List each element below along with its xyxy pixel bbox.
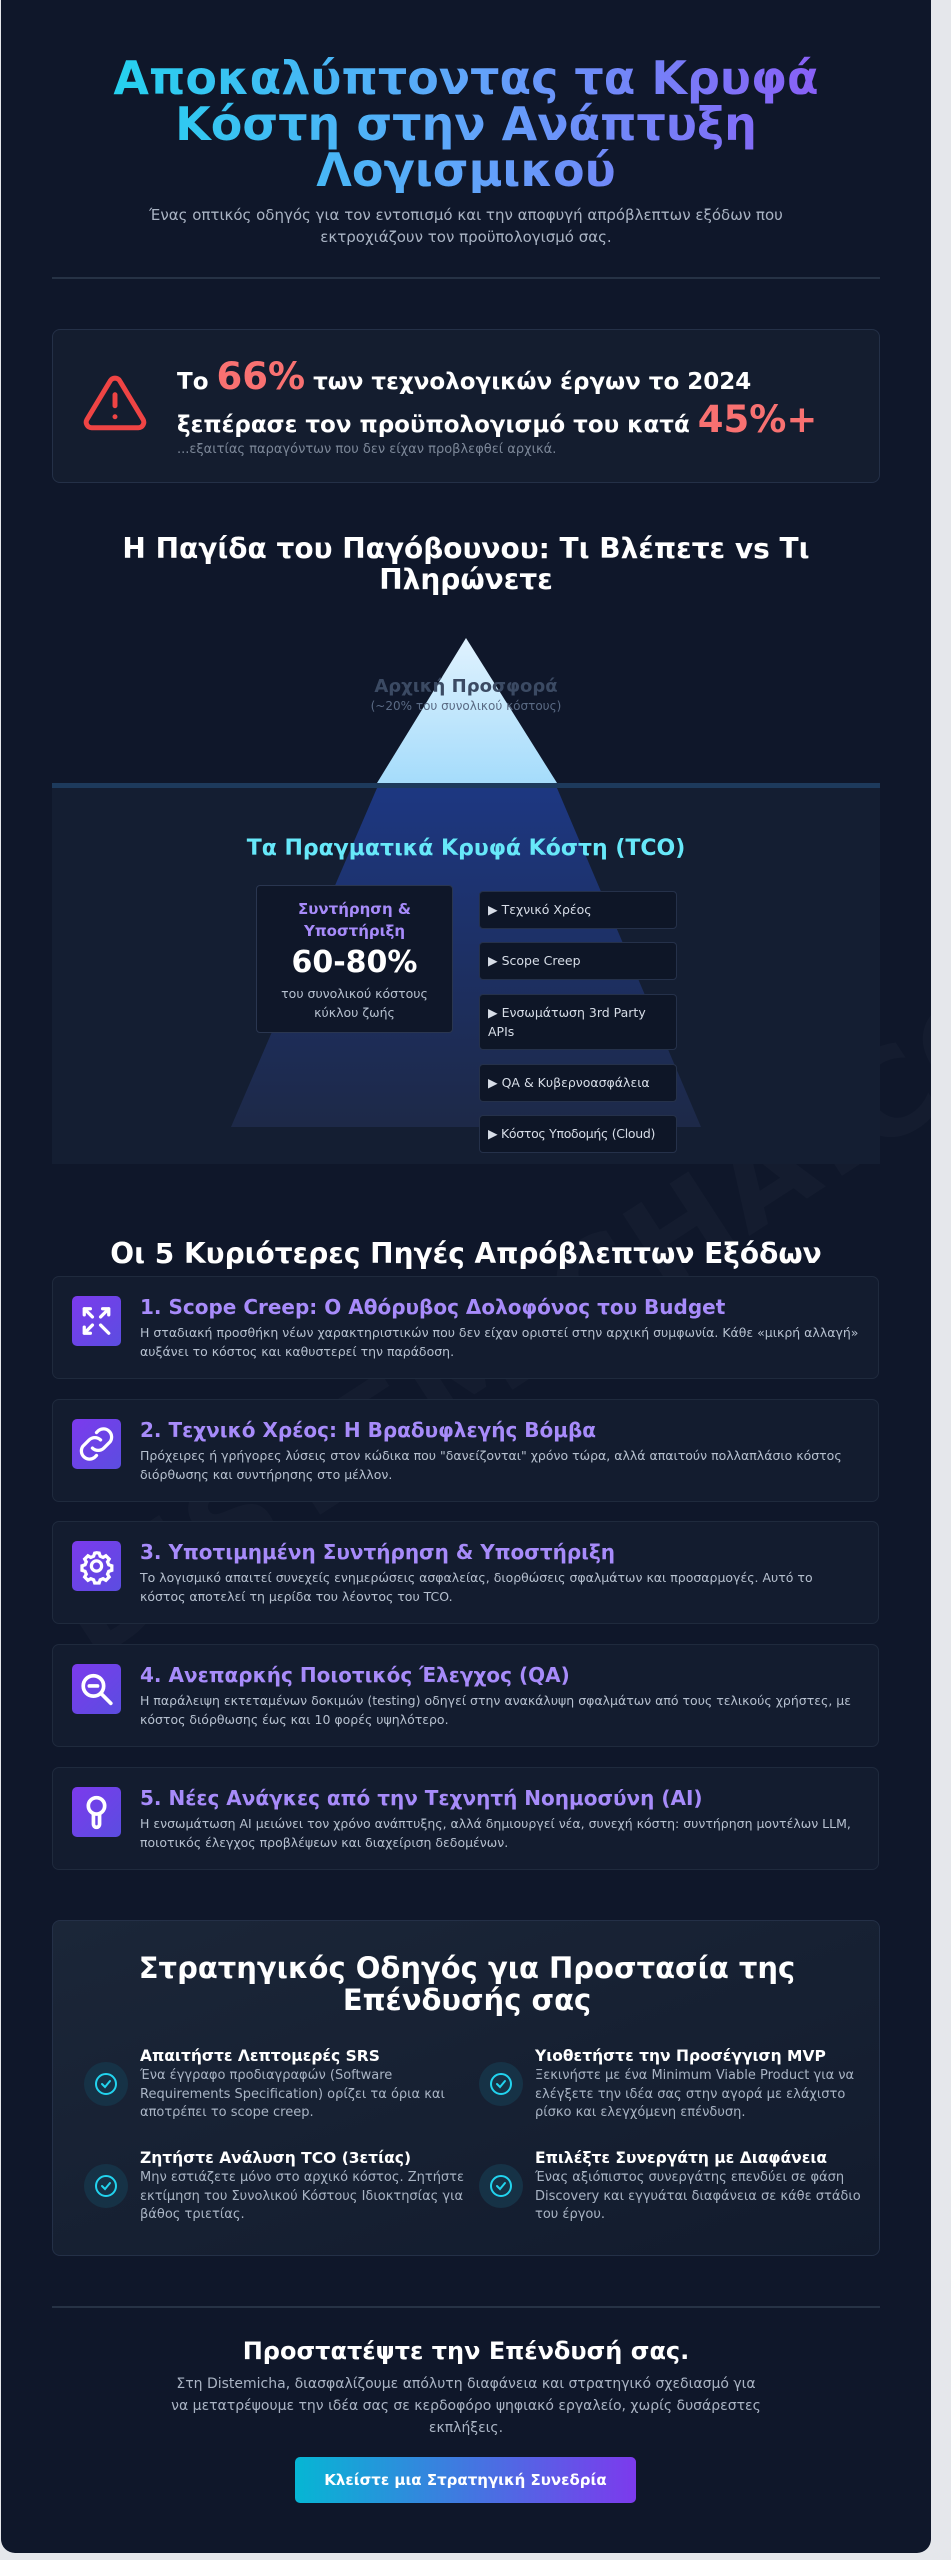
TCO heading: Τα Πραγματικά Κρυφά Κόστη (TCO) [247, 836, 685, 861]
cause 3: 3. Υποτιμημένη Συντήρηση & Υποστήριξη [140, 1540, 615, 1564]
icon: gear [72, 1541, 121, 1591]
iceberg chart [231, 638, 701, 1127]
cause 5: 5. Νέες Ανάγκες από την Τεχνητή Νοημοσύνη (AI) [140, 1786, 703, 1810]
heading: top 5: Οι 5 Κυριότερες Πηγές Απρόβλεπτων Εξόδων [110, 1237, 822, 1270]
panel: strategy: Ζητήστε Ανάλυση TCO (3ετίας) [140, 2149, 411, 2167]
maintenance box [256, 885, 453, 1033]
closing heading: Προστατέψτε την Επένδυσή σας. [243, 2337, 689, 2365]
icon: magnifier [72, 1664, 121, 1714]
cause 3 [52, 1521, 879, 1624]
cause 4: Η παράλειψη εκτεταμένων δοκιμών (testing) οδηγεί στην ανακάλυψη σφαλμάτων από τους τελικούς χρήστες, με κόστος διόρθωσης έως και 10 φορές υψηλότερο. [140, 1693, 851, 1727]
subtitle: Ένας οπτικός οδηγός για τον εντοπισμό και την αποφυγή απρόβλεπτων εξόδων που εκτροχιάζουν τον προϋπολογισμό σας. [149, 206, 783, 246]
stat callout [52, 329, 880, 483]
iceberg tip [371, 638, 561, 783]
panel: strategy: Υιοθετήστε την Προσέγγιση MVP [535, 2047, 826, 2065]
cause 2 [52, 1399, 879, 1502]
closing paragraph: Στη Distemicha, διασφαλίζουμε απόλυτη διαφάνεια και στρατηγικό σχεδιασμό για να μετατρέψουμε την ιδέα σας σε κερδοφόρο ψηφιακό εργαλείο, χωρίς δυσάρεστες εκπλήξεις. [171, 2376, 761, 2436]
cause 5: Η ενσωμάτωση AI μειώνει τον χρόνο ανάπτυξης, αλλά δημιουργεί νέα, συνεχή κόστη: συντήρηση μοντέλων LLM, ποιοτικός έλεγχος προβλέψεων και διαχείριση δεδομένων. [140, 1816, 851, 1850]
panel: strategy: Ξεκινήστε με ένα Minimum Viable Product για να ελέγξετε την ιδέα σας στην αγορά με ελάχιστο ρίσκο και ελεγχόμενη επένδυση. [535, 2068, 854, 2120]
stat text: ξεπέρασε τον προϋπολογισμό του κατά 45%+ [177, 398, 817, 441]
heading: iceberg: Η Παγίδα του Παγόβουνου: Τι Βλέπετε vs Τι Πληρώνετε [122, 532, 810, 596]
maintenance box: κύκλου ζωής [314, 1005, 395, 1020]
maintenance box: 60-80% [291, 945, 418, 980]
cause 5 [52, 1767, 879, 1870]
panel: strategy: Μην εστιάζετε μόνο στο αρχικό κόστος. Ζητήστε εκτίμηση του Συνολικού Κόστους Ιδιοκτησίας για βάθος τριετίας. [140, 2170, 464, 2222]
panel: strategy [52, 1920, 880, 2256]
hidden cost list: ▶ Ενσωμάτωση 3rd Party APIs [488, 1005, 646, 1039]
CTA button: Κλείστε μια Στρατηγική Συνεδρία [324, 2471, 607, 2489]
icon: warning triangle [84, 376, 146, 430]
cause 4 [52, 1644, 879, 1747]
cause 2: 2. Τεχνικό Χρέος: Η Βραδυφλεγής Βόμβα [140, 1418, 596, 1442]
cause 1: Η σταδιακή προσθήκη νέων χαρακτηριστικών που δεν είχαν οριστεί στην αρχική συμφωνία. Κάθε «μικρή αλλαγή» αυξάνει το κόστος και καθυστερεί την παράδοση. [140, 1325, 858, 1359]
iceberg tip: (~20% του συνολικού κόστους) [371, 699, 561, 713]
hidden cost list: ▶ Scope Creep [488, 953, 581, 968]
tip 4 [479, 2149, 861, 2222]
CTA button [295, 2457, 636, 2503]
icon: arrows [72, 1296, 121, 1346]
cause 1 [52, 1276, 879, 1379]
stat text [177, 355, 817, 441]
strategy heading: Στρατηγικός Οδηγός για Προστασία της Επένδυσής σας [139, 1951, 795, 2017]
hidden cost list: ▶ Τεχνικό Χρέος [488, 902, 592, 917]
hidden cost list [479, 891, 677, 1153]
maintenance box: Συντήρηση & [298, 900, 411, 918]
underwater panel [52, 783, 880, 1164]
hidden cost list: ▶ Κόστος Υποδομής (Cloud) [488, 1126, 655, 1141]
panel: strategy: Ένα έγγραφο προδιαγραφών (Software Requirements Specification) ορίζει τα όρια και αποτρέπει το scope creep. [140, 2068, 445, 2120]
cause 2: Πρόχειρες ή γρήγορες λύσεις στον κώδικα που "δανείζονται" χρόνο τώρα, αλλά απαιτούν πολλαπλάσιο κόστος διόρθωσης και συντήρησης στο μέλλον. [140, 1448, 842, 1482]
hidden cost list: ▶ QA & Κυβερνοασφάλεια [488, 1075, 650, 1090]
stat subtext: ...εξαιτίας παραγόντων που δεν είχαν προβλεφθεί αρχικά. [177, 442, 556, 457]
cause 3: Το λογισμικό απαιτεί συνεχείς ενημερώσεις ασφαλείας, διορθώσεις σφαλμάτων και προσαρμογές. Αυτό το κόστος αποτελεί τη μερίδα του λέοντος του TCO. [140, 1570, 813, 1604]
title: Αποκαλύπτοντας τα Κρυφά Κόστη στην Ανάπτυξη Λογισμικού [113, 51, 819, 197]
icon: link [72, 1419, 121, 1469]
iceberg tip: Αρχική Προσφορά [374, 676, 558, 697]
cause 1: 1. Scope Creep: Ο Αθόρυβος Δολοφόνος του Budget [140, 1295, 725, 1319]
iceberg underwater [231, 788, 701, 1127]
maintenance box: Υποστήριξη [304, 922, 405, 940]
maintenance box: του συνολικού κόστους [281, 986, 428, 1001]
stat text: Το 66% των τεχνολογικών έργων το 2024 [177, 355, 751, 398]
tip 1 [84, 2047, 445, 2120]
icon: bulb [72, 1787, 121, 1837]
panel: strategy: Επιλέξτε Συνεργάτη με Διαφάνεια [535, 2149, 827, 2167]
tip 3 [84, 2149, 464, 2222]
panel: strategy: Απαιτήστε Λεπτομερές SRS [140, 2047, 380, 2065]
tip 2 [479, 2047, 854, 2120]
cause 4: 4. Ανεπαρκής Ποιοτικός Έλεγχος (QA) [140, 1663, 570, 1687]
panel: strategy: Ένας αξιόπιστος συνεργάτης επενδύει σε φάση Discovery και εγγυάται διαφάνεια σε κάθε στάδιο του έργου. [535, 2170, 861, 2222]
